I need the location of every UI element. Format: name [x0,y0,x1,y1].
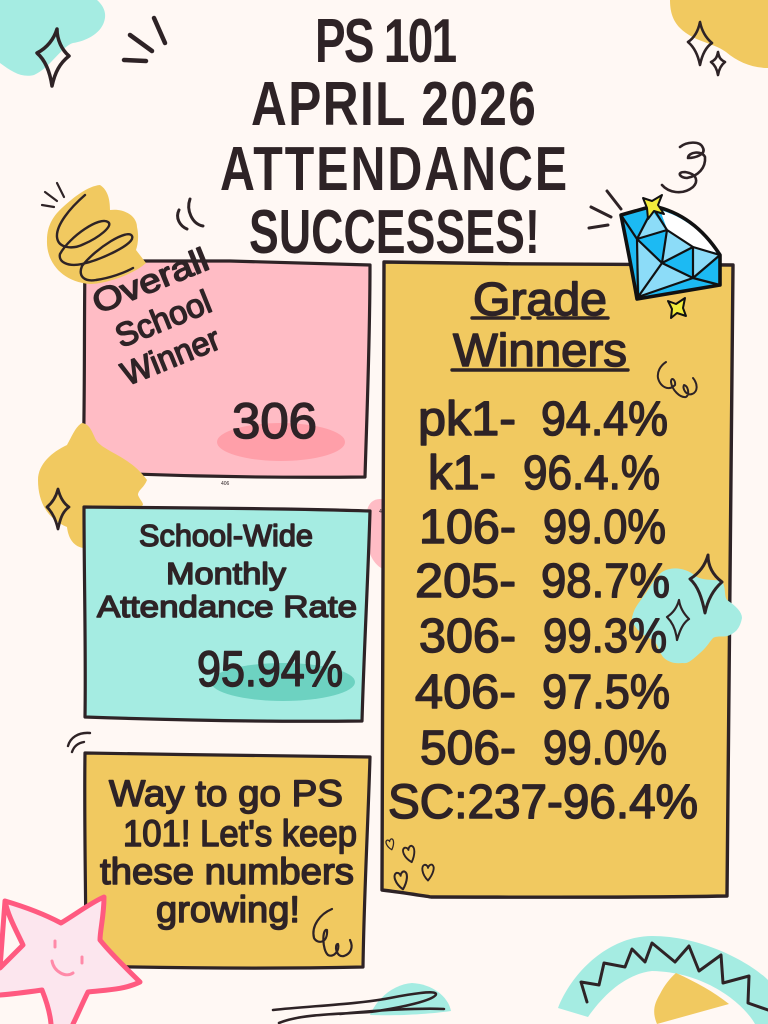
blob: teal bottom [370,983,451,1015]
list: grade percentages: k1- [428,447,496,500]
panel: note [85,753,370,968]
label: overall school winner [87,240,225,392]
icon: scribble bottom [273,992,444,1023]
star face [52,941,82,975]
icon: burst lines top [124,18,165,61]
label: overall school winner: School [110,283,216,354]
icon: yellow stars around diamond [643,195,686,318]
icon: hearts [385,839,434,890]
panel: monthly attendance rate [84,507,370,721]
highlight ellipse [217,423,345,461]
list: grade percentages: SC:237-96.4% [388,776,698,829]
icon: squiggle panel [658,362,697,397]
wedge: yellow [654,973,729,1024]
note text: 101! Let's keep [123,813,357,854]
heading: grade winners: Grade [473,273,607,325]
heading: grade winners [453,273,627,376]
icon: sparkles on teal [667,555,722,640]
icon: sparkle top left [37,29,69,86]
icon: squiggle note [313,909,352,956]
label: overall school winner: Overall [87,240,214,320]
title: PS 101 [315,6,457,76]
list: grade percentages: 99.0% [543,722,667,775]
icon: diamond [621,206,720,299]
blob: yellow top right [670,0,768,68]
icon: curved ticks above note [68,733,90,752]
icon: burst lines diamond [589,191,621,228]
list: grade percentages: pk1- [418,393,516,446]
list: grade percentages: 97.5% [542,666,670,719]
title: SUCCESSES! [249,198,540,267]
icon: scribble [57,195,133,280]
list: grade percentages: 99.3% [543,610,667,663]
list: grade percentages: 205- [415,555,516,608]
list: grade percentages: 506- [420,722,516,775]
list: grade percentages [388,393,698,829]
blob: yellow behind scribble [47,185,146,284]
list: grade percentages: 406- [415,666,516,719]
value: 306: 306 [232,393,317,449]
blob: teal over panel [632,568,742,663]
panel: overall school winner [42,183,370,487]
list: grade percentages: 96.4.% [523,447,660,500]
list: grade percentages: 98.7% [541,555,670,608]
blob: pink behind right [367,499,386,570]
highlight ellipse [211,663,355,701]
icon: sparkles top right [688,22,725,75]
icon: burst lines small [42,183,64,207]
icon: star [0,897,140,1024]
title [220,6,567,267]
panel: grade winners [382,262,742,897]
zigzag line [581,943,768,1010]
note text: these numbers [100,851,354,892]
icon: curved ticks [178,199,203,229]
icon: squiggle above diamond [662,143,705,192]
note text: growing! [156,889,300,930]
title: ATTENDANCE [220,134,567,203]
blob: yellow left middle [38,423,147,548]
arc: teal [558,936,768,1024]
icon: sparkle left [47,489,69,529]
label: overall school winner: Winner [116,320,225,392]
list: grade percentages: 306- [419,610,516,663]
heading underlines [452,318,628,370]
list: grade percentages: 94.4% [541,393,668,446]
label: school-wide monthly attendance rate: School-Wide [139,518,313,553]
label: school-wide monthly attendance rate: Attendance Rate [97,589,357,624]
title: APRIL 2026 [251,69,536,138]
note text: Way to go PS [109,773,343,814]
list: grade percentages: 99.0% [543,501,666,554]
heading: grade winners: Winners [453,324,627,376]
blob: teal top left [0,0,105,76]
tiny caption 406 pink: 406 [379,509,388,515]
list: grade percentages: 106- [419,501,516,554]
label: school-wide monthly attendance rate: Monthly [166,556,287,591]
value: 95.94%: 95.94% [197,641,343,697]
note text [100,773,357,930]
label: school-wide monthly attendance rate [97,518,357,624]
tiny caption 406: 406 [221,481,230,487]
